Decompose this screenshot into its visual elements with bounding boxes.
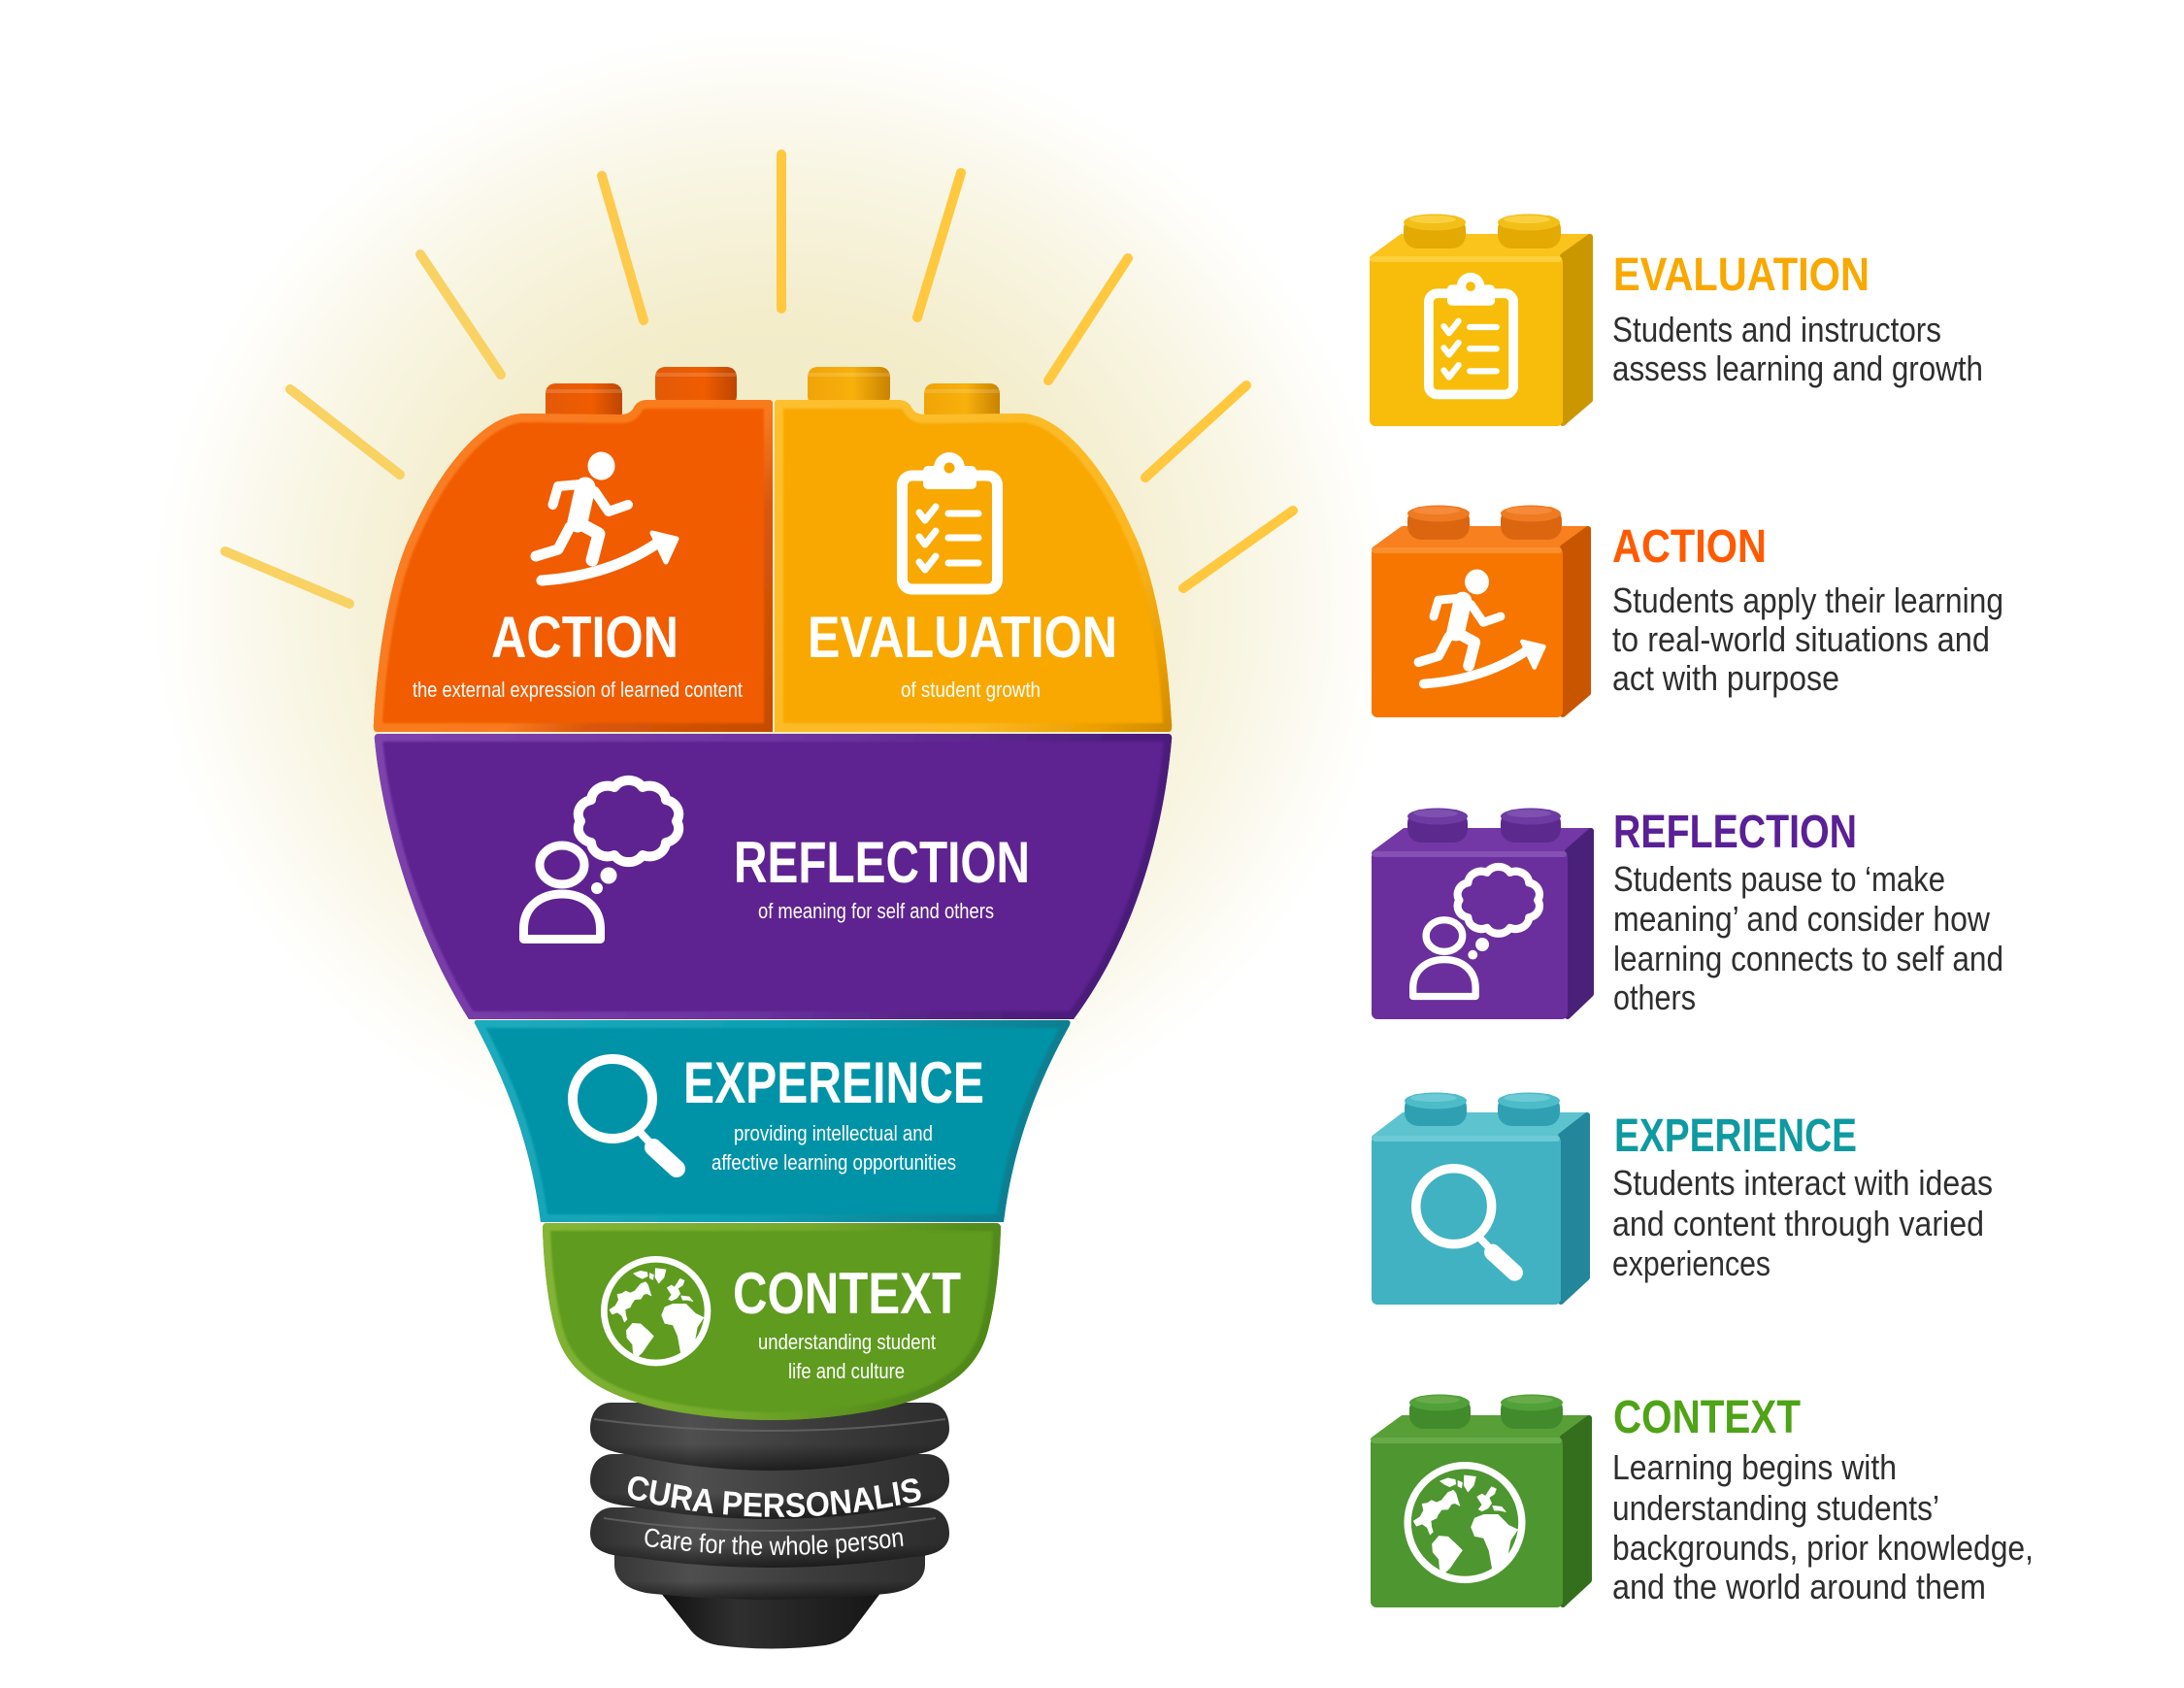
brick: experience <box>1372 1093 1587 1305</box>
experience legend title: EXPERIENCE <box>1614 1110 1857 1162</box>
context legend text: Learning begins with <box>1612 1447 1897 1487</box>
reflection legend text: meaning’ and consider how <box>1613 899 1991 939</box>
legend: action <box>1372 505 2003 717</box>
experience title: EXPEREINCE <box>683 1050 984 1115</box>
icon: globe <box>604 1259 708 1363</box>
reflection legend text: Students pause to ‘make <box>1613 859 1945 899</box>
segment: context <box>543 1223 1001 1420</box>
action legend text: to real-world situations and <box>1612 619 1990 659</box>
brick: evaluation <box>1370 214 1590 426</box>
segment: experience <box>475 1020 1071 1222</box>
segment: reflection <box>375 734 1172 1019</box>
reflection subtitle: of meaning for self and others <box>758 899 994 923</box>
action subtitle: the external expression of learned content <box>413 678 743 702</box>
context subtitle: understanding student <box>758 1330 936 1354</box>
segment: action <box>374 367 773 732</box>
icon: runner on arrow <box>536 452 677 580</box>
icon: person thinking <box>524 780 678 940</box>
icon: magnifier <box>573 1059 677 1169</box>
context subtitle: life and culture <box>788 1359 905 1383</box>
legend: evaluation <box>1370 214 1983 426</box>
experience legend text: and content through varied <box>1612 1204 1984 1243</box>
reflection legend text: learning connects to self and <box>1613 939 2003 978</box>
brick: context <box>1371 1394 1589 1607</box>
light rays <box>225 154 1293 604</box>
evaluation legend text: Students and instructors <box>1612 310 1941 349</box>
reflection legend title: REFLECTION <box>1613 807 1857 858</box>
action legend title: ACTION <box>1612 521 1767 573</box>
action legend text: act with purpose <box>1612 658 1839 698</box>
context legend title: CONTEXT <box>1613 1392 1801 1443</box>
legend: reflection <box>1372 807 2003 1019</box>
action title: ACTION <box>491 605 678 670</box>
reflection title: REFLECTION <box>734 830 1030 895</box>
evaluation legend text: assess learning and growth <box>1612 348 1983 388</box>
reflection legend text: others <box>1613 977 1696 1017</box>
legend: context <box>1371 1392 2034 1607</box>
evaluation title: EVALUATION <box>808 605 1117 670</box>
base text: cura personalis: CURA PERSONALIS <box>627 1476 921 1517</box>
evaluation subtitle: of student growth <box>901 678 1041 702</box>
context legend text: understanding students’ <box>1612 1488 1939 1528</box>
legend: experience <box>1372 1093 1993 1305</box>
experience legend text: Students interact with ideas <box>1612 1163 1993 1203</box>
bulb screw base <box>590 1403 949 1648</box>
segment: evaluation <box>775 367 1172 732</box>
action legend text: Students apply their learning <box>1612 580 2003 620</box>
brick: reflection <box>1372 808 1591 1019</box>
context title: CONTEXT <box>733 1261 961 1326</box>
icon: clipboard <box>903 452 998 589</box>
lightbulb <box>373 367 1173 1648</box>
brick: action <box>1372 505 1588 717</box>
context legend text: and the world around them <box>1612 1567 1986 1606</box>
evaluation legend title: EVALUATION <box>1613 249 1870 301</box>
context legend text: backgrounds, prior knowledge, <box>1612 1528 2034 1568</box>
base text: care for the whole person: Care for the whole person <box>645 1528 903 1559</box>
experience legend text: experiences <box>1612 1243 1770 1283</box>
experience subtitle: affective learning opportunities <box>711 1150 956 1175</box>
experience subtitle: providing intellectual and <box>734 1121 933 1145</box>
